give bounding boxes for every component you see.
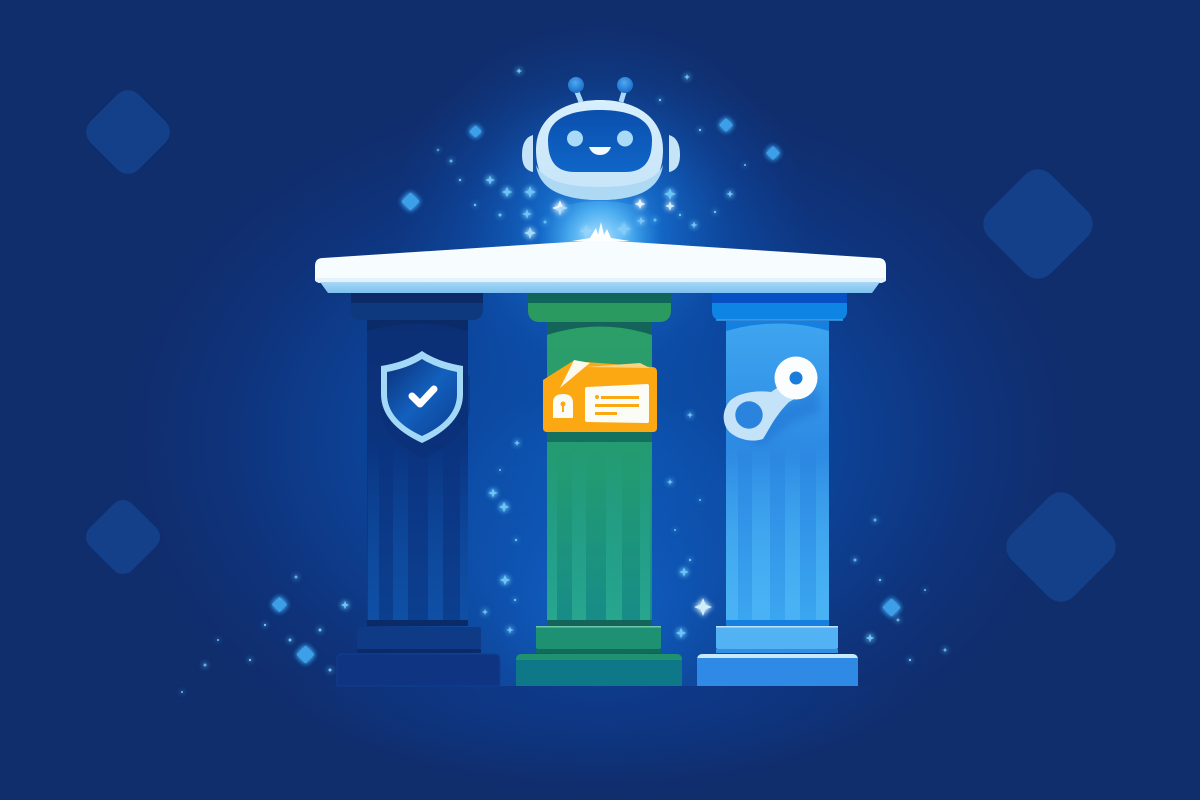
roof slab <box>315 222 886 293</box>
eyes <box>567 130 633 146</box>
middle plinth <box>536 626 661 653</box>
ears <box>522 135 680 172</box>
background glow <box>380 10 820 686</box>
left shaft <box>367 320 468 626</box>
lock <box>553 394 573 418</box>
left capital <box>351 292 483 320</box>
floor reflection <box>270 686 930 786</box>
pillar: security (navy) <box>337 292 500 686</box>
right capital <box>712 292 847 320</box>
sparkle particles <box>181 68 947 693</box>
chin shade <box>536 165 663 200</box>
icon: orange folder with card <box>543 360 657 432</box>
left base <box>337 654 500 686</box>
smile <box>589 147 611 155</box>
head <box>536 100 663 200</box>
icon: shield with check <box>380 351 470 458</box>
robot <box>522 77 680 200</box>
icon: wrench link <box>724 356 820 446</box>
right base <box>697 654 858 686</box>
left plinth <box>357 627 481 653</box>
visor <box>548 110 652 172</box>
card <box>585 384 649 423</box>
middle base <box>516 654 682 686</box>
antennae <box>568 77 633 102</box>
pillar: integration (light blue) <box>697 292 858 686</box>
pillar: data (green) <box>516 292 682 686</box>
decorative diamonds <box>80 84 1123 609</box>
right shaft <box>726 321 829 626</box>
middle capital <box>528 292 671 322</box>
middle shaft <box>547 322 652 626</box>
roof glow spike <box>530 201 670 269</box>
right plinth <box>716 626 838 653</box>
